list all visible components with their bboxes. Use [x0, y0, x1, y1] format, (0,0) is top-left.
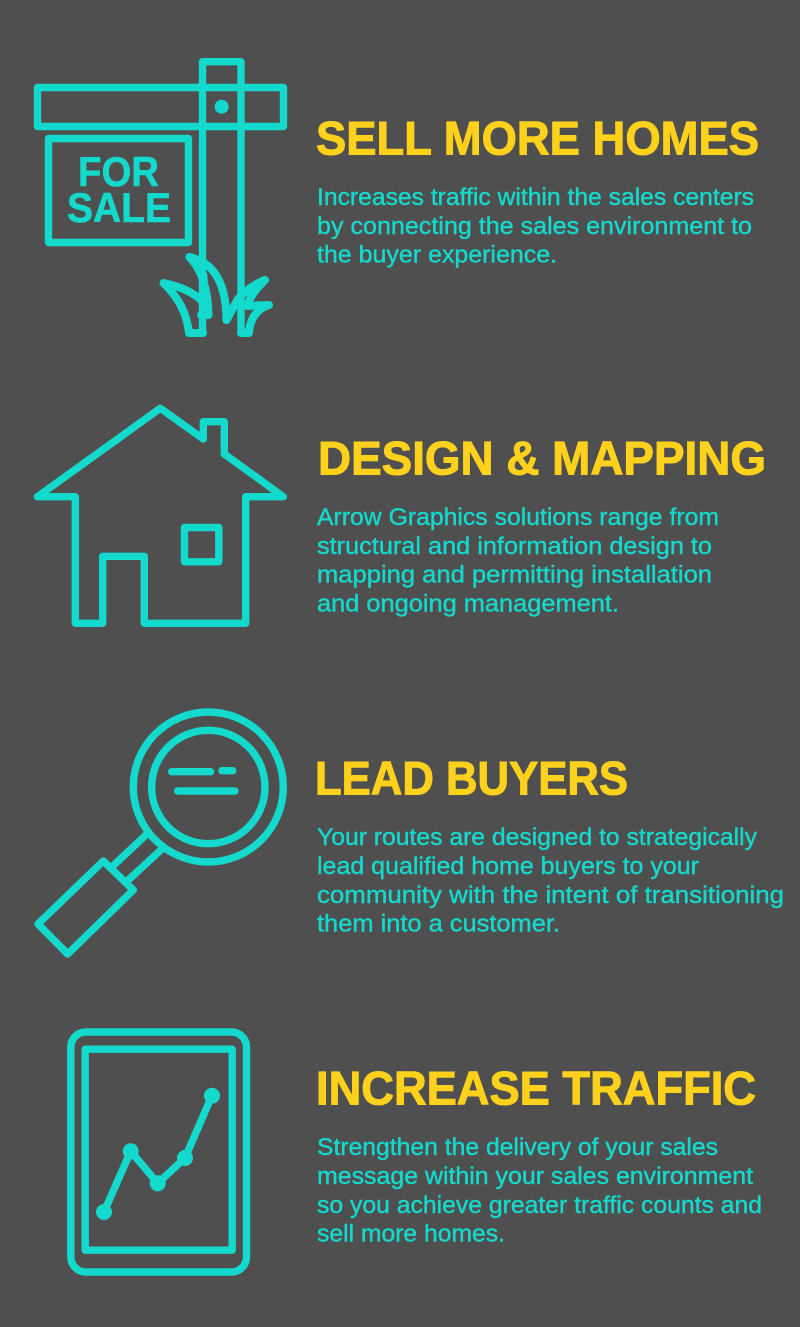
line chart — [96, 1088, 220, 1220]
text block: design and mapping description — [317, 504, 719, 618]
text block: lead buyers description: community with the intent of transitioning — [317, 882, 784, 909]
heading: increase traffic: INCREASE TRAFFIC — [316, 1062, 756, 1115]
sign post and crossbar — [38, 62, 284, 333]
text block: design and mapping description: mapping and permitting installation — [317, 562, 712, 589]
lens rings — [133, 712, 283, 862]
lens text lines — [172, 771, 235, 791]
icon: post bolt — [215, 100, 229, 114]
icon: magnifying glass — [38, 712, 283, 954]
for sale board: SALE — [67, 184, 171, 231]
text block: sell more homes description: the buyer experience. — [317, 242, 557, 269]
text block: increase traffic description: Strengthen the delivery of your sales — [317, 1134, 718, 1161]
for sale board: FOR — [78, 148, 159, 195]
tablet frame — [71, 1032, 246, 1272]
icon: house window — [184, 528, 219, 562]
icon: grass — [164, 257, 269, 333]
heading: design and mapping: DESIGN & MAPPING — [318, 432, 766, 485]
text block: increase traffic description: message within your sales environment — [317, 1163, 753, 1190]
icon: tablet with line chart — [71, 1032, 246, 1272]
text block: design and mapping description: structural and information design to — [317, 533, 712, 560]
text block: sell more homes description — [317, 184, 754, 269]
text block: sell more homes description: Increases traffic within the sales centers — [317, 184, 754, 211]
text block: increase traffic description: so you achieve greater traffic counts and — [317, 1192, 762, 1219]
magnifier shaft and handle — [38, 833, 163, 954]
heading: lead buyers: LEAD BUYERS — [315, 752, 628, 805]
text block: increase traffic description — [317, 1134, 762, 1248]
text block: design and mapping description: Arrow Graphics solutions range from — [317, 504, 719, 531]
text block: sell more homes description: by connecting the sales environment to — [317, 213, 752, 240]
text block: lead buyers description: lead qualified home buyers to your — [317, 853, 699, 880]
for sale board — [48, 138, 188, 242]
text block: lead buyers description — [317, 824, 784, 938]
icon: house — [37, 408, 283, 623]
text block: lead buyers description: them into a customer. — [317, 911, 560, 938]
text block: lead buyers description: Your routes are designed to strategically — [317, 824, 757, 851]
heading: sell more homes: SELL MORE HOMES — [316, 112, 759, 165]
text block: design and mapping description: and ongoing management. — [317, 590, 619, 618]
text block: increase traffic description: sell more homes. — [317, 1221, 505, 1248]
icon: for sale sign — [38, 62, 284, 333]
